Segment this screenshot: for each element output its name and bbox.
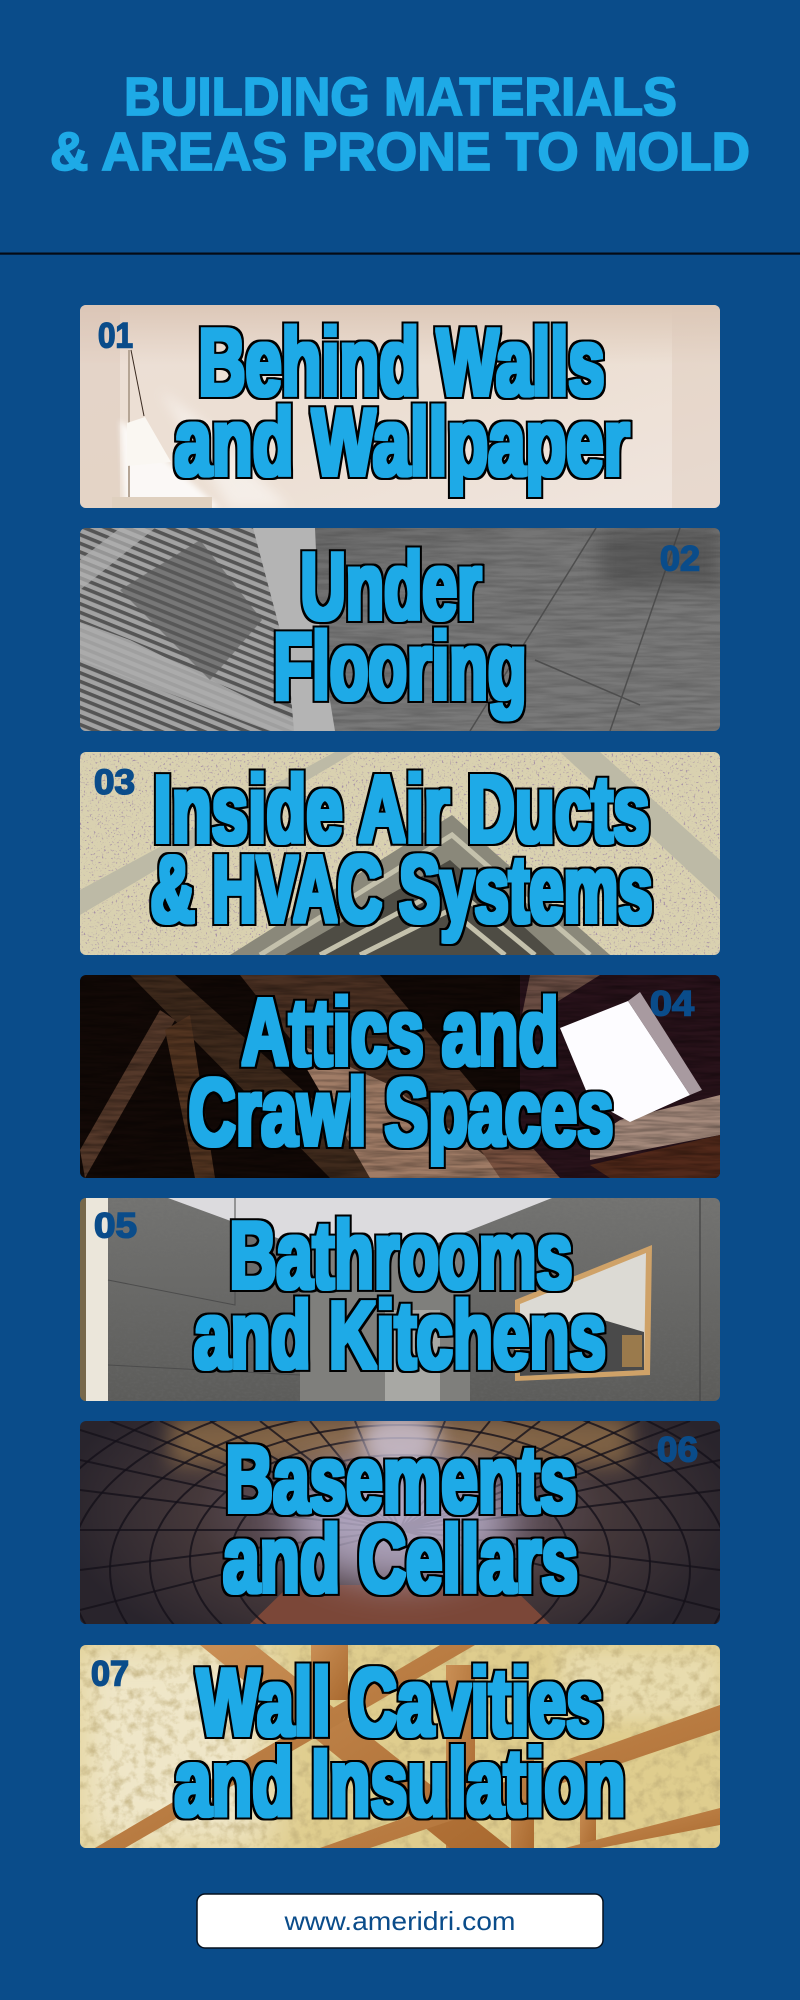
panel: 02 under flooring	[80, 528, 720, 731]
heading: attics and crawl spaces: Crawl Spaces	[188, 1059, 614, 1166]
divider line	[0, 252, 800, 255]
panel: 04 attics	[80, 975, 720, 1178]
title	[50, 67, 750, 182]
number 02: 02	[660, 540, 700, 578]
title: & AREAS PRONE TO MOLD	[50, 122, 750, 182]
heading: attics and crawl spaces: Attics and	[242, 979, 558, 1086]
heading: basements and cellars: Basements	[226, 1426, 576, 1533]
heading: attics and crawl spaces	[188, 979, 614, 1166]
number 04: 04	[650, 984, 695, 1024]
heading: bathrooms and kitchens: and Kitchens	[194, 1282, 606, 1389]
heading: basements and cellars	[223, 1426, 578, 1613]
heading: basements and cellars: and Cellars	[223, 1506, 578, 1613]
number 05: 05	[94, 1206, 137, 1246]
heading: wall cavities and insulation: Wall Cavities	[197, 1649, 603, 1756]
heading: wall cavities and insulation	[174, 1649, 626, 1836]
panel: 05 bathrooms	[80, 1198, 720, 1401]
heading: under flooring: Under	[300, 533, 482, 640]
number 03: 03	[94, 763, 135, 802]
photo: grey floor with heating mat	[80, 528, 720, 731]
number 06: 06	[657, 1430, 698, 1470]
number 01: 01	[98, 316, 133, 356]
photo: ceiling tile and air vent	[80, 752, 720, 955]
photo: spray foam insulation and timber	[80, 1645, 720, 1848]
panel: 07 wall cavities	[80, 1645, 720, 1848]
heading: bathrooms and kitchens: Bathrooms	[230, 1202, 572, 1309]
heading: bathrooms and kitchens	[194, 1202, 606, 1389]
photo: bright room wall with lamp	[80, 305, 720, 509]
title: BUILDING MATERIALS	[124, 67, 677, 127]
heading: under flooring: Flooring	[274, 613, 526, 720]
number 07: 07	[91, 1654, 129, 1694]
photo: grey tiled bathroom with mirror	[80, 1198, 720, 1401]
photo: dark attic with skylight	[80, 975, 720, 1178]
heading: behind walls and wallpaper	[174, 309, 630, 496]
heading: under flooring	[274, 533, 526, 720]
panel: 06 basements	[80, 1421, 720, 1624]
website button: www.ameridri.com	[283, 1906, 516, 1936]
panel: 03 air ducts	[80, 752, 720, 955]
heading: behind walls and wallpaper: Behind Walls	[198, 309, 604, 416]
panel: 01 behind walls	[80, 305, 720, 509]
photo: vaulted brick cellar	[80, 1421, 720, 1624]
website button	[197, 1894, 603, 1948]
heading: inside air ducts and hvac systems	[150, 756, 652, 943]
